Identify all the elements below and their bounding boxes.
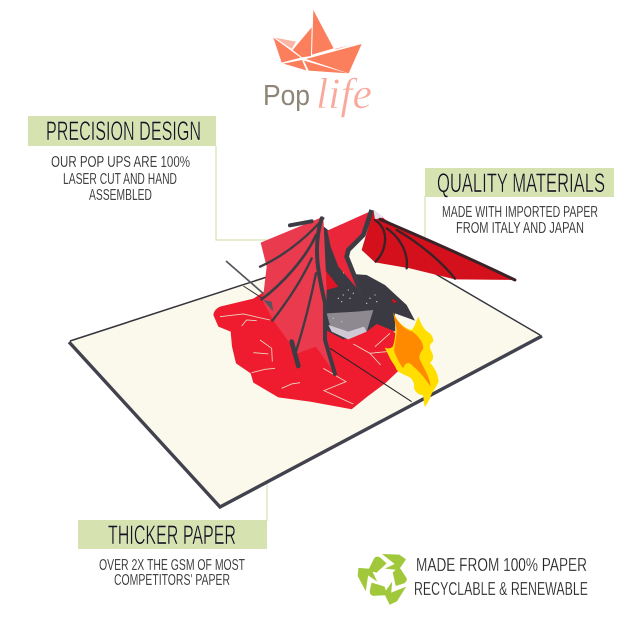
pop-up card illustration — [69, 209, 542, 507]
recycling note — [414, 555, 588, 599]
logo word: Pop: Pop — [263, 80, 310, 112]
description: OVER 2X THE GSM OF MOST — [99, 557, 245, 574]
dragon scales — [333, 289, 377, 322]
right wing — [362, 210, 516, 280]
connector lines — [216, 146, 425, 521]
icon: recycling arrows — [354, 554, 413, 607]
description — [51, 154, 190, 204]
cracks in base — [220, 314, 390, 404]
heading band — [425, 168, 614, 197]
description: LASER CUT AND HAND — [63, 171, 177, 188]
description: OUR POP UPS ARE 100% — [51, 154, 190, 171]
heading band — [28, 116, 216, 146]
flame — [385, 313, 439, 407]
panel: precision design — [28, 116, 216, 204]
heading: PRECISION DESIGN — [46, 116, 201, 146]
heading band — [78, 520, 267, 549]
spear — [226, 261, 265, 295]
centre wing panel — [327, 210, 373, 293]
dragon head eye — [392, 298, 397, 303]
description: ASSEMBLED — [89, 187, 152, 204]
fold line — [330, 348, 412, 402]
panel: thicker paper — [78, 520, 267, 589]
panel: quality materials — [425, 168, 614, 237]
dragon belly — [327, 310, 373, 339]
description — [99, 557, 245, 589]
logo: Poplife — [263, 10, 372, 118]
red puddle base — [213, 290, 399, 409]
logo word: life: life — [316, 71, 372, 118]
heading: THICKER PAPER — [108, 520, 236, 550]
left wing — [261, 217, 335, 374]
icon: origami boat — [273, 10, 362, 73]
description: COMPETITORS' PAPER — [114, 572, 230, 589]
description — [442, 204, 598, 237]
dragon body — [320, 223, 415, 339]
open card — [69, 240, 542, 507]
